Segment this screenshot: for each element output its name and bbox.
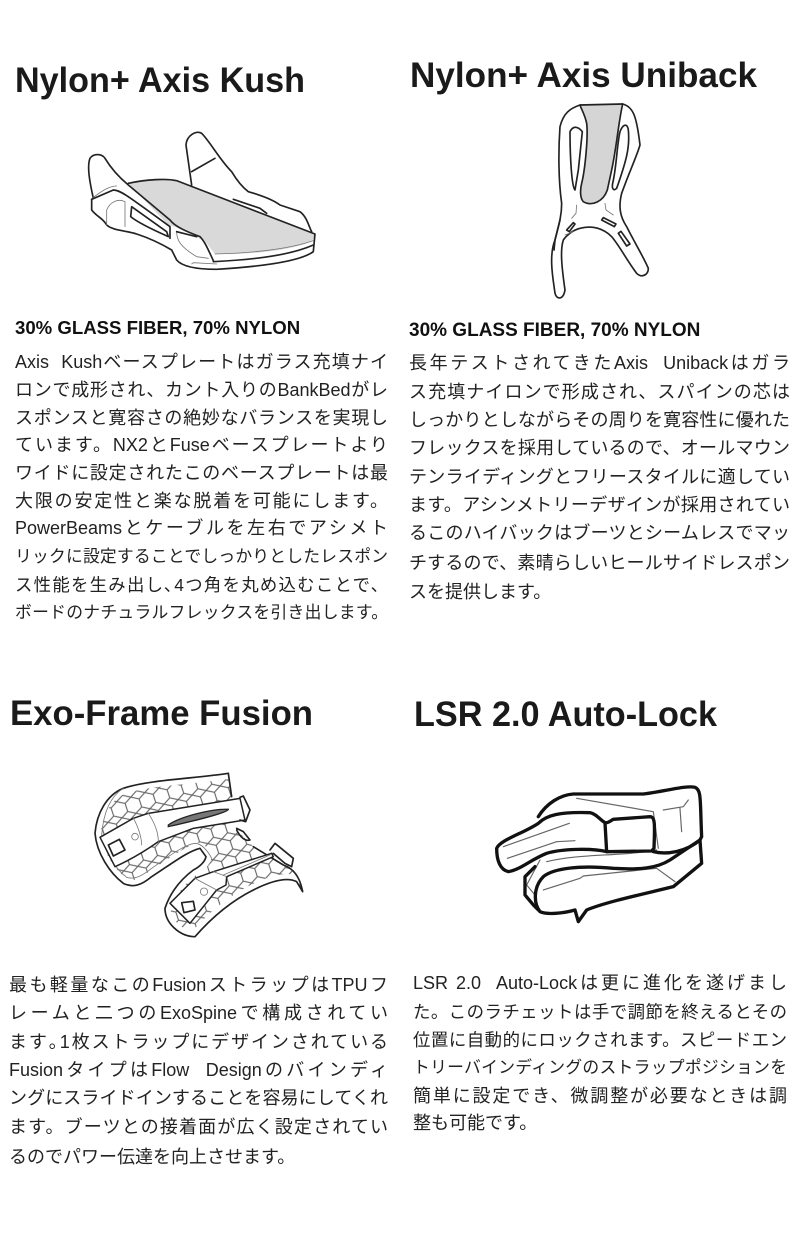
heading: Nylon+ Axis Uniback: Nylon+ Axis Uniback [410, 56, 758, 95]
text block: Axis Kush description: ボードのナチュラルフレックスを引き出します。 [15, 603, 388, 622]
text block: Axis Uniback description: ス充填ナイロンで形成され、スパインの芯は [409, 382, 790, 402]
text block: Axis Uniback description: ます。アシンメトリーデザインが採用されてい [409, 495, 790, 515]
icon: Axis Uniback highback [552, 104, 648, 298]
text block: LSR 2.0 Auto-Lock description: 位置に自動的にロックされます。スピードエン [413, 1030, 787, 1050]
text block: LSR 2.0 Auto-Lock description: 簡単に設定でき、微調整が必要なときは調 [413, 1086, 787, 1106]
text block: Exo-Frame Fusion description: ます。ブーツとの接着面が広く設定されてい [9, 1117, 388, 1137]
text block: Axis Kush description: ています。NX2とFuseベースプレートより [15, 435, 388, 455]
text block: Axis Kush description: ス性能を生み出し､4つ角を丸め込むことで、 [15, 575, 388, 595]
text block: Axis Kush description: スポンスと寛容さの絶妙なバランスを実現し [15, 408, 388, 428]
text block: Exo-Frame Fusion description: ます｡1枚ストラップにデザインされている [9, 1032, 388, 1052]
text block: Axis Kush description: ワイドに設定されたこのベースプレートは最 [15, 463, 388, 483]
text block: LSR 2.0 Auto-Lock description [413, 973, 787, 1133]
text block: Exo-Frame Fusion description: 最も軽量なこのFusionストラップはTPUフ [9, 975, 388, 995]
text block: Axis Kush description [15, 352, 388, 622]
text block: Exo-Frame Fusion description: るのでパワー伝達を向上させます。 [9, 1147, 295, 1167]
text block: Axis Uniback description: フレックスを採用しているので、オールマウン [409, 438, 790, 458]
text block: Axis Kush description: 大限の安定性と楽な脱着を可能にします。 [15, 491, 388, 511]
text block: Axis Uniback description: 長年テストされてきたAxis Unibackはガラ [409, 353, 790, 373]
text block: Axis Kush description: リックに設定することでしっかりとしたレスポン [15, 547, 388, 566]
text block: Axis Kush description: Axis Kushベースプレートはガラス充填ナイ [15, 352, 388, 372]
text block: Axis Uniback description: しっかりとしながらその周りを寛容性に優れた [409, 410, 790, 430]
heading: LSR 2.0 Auto-Lock: LSR 2.0 Auto-Lock [414, 695, 718, 734]
text block: Exo-Frame Fusion description: FusionタイプはFlow Designのバインディ [9, 1060, 388, 1080]
text block: Exo-Frame Fusion description: ングにスライドインすることを容易にしてくれ [9, 1088, 388, 1108]
text block: LSR 2.0 Auto-Lock description: た。このラチェットは手で調節を終えるとその [413, 1002, 787, 1022]
text block: LSR 2.0 Auto-Lock description: LSR 2.0 Auto-Lockは更に進化を遂げまし [413, 973, 787, 993]
text block: LSR 2.0 Auto-Lock description: トリーバインディングのストラップポジションを [413, 1058, 787, 1077]
text block: Axis Uniback description: チするので、素晴らしいヒールサイドレスポン [409, 553, 790, 573]
heading: Nylon+ Axis Kush: Nylon+ Axis Kush [15, 61, 305, 100]
text block: Axis Uniback description: スを提供します。 [409, 582, 551, 602]
heading: Exo-Frame Fusion: Exo-Frame Fusion [10, 694, 313, 733]
text block: Axis Kush description: PowerBeamsとケーブルを左右でアシメト [15, 518, 388, 538]
text block: Exo-Frame Fusion description: レームと二つのExoSpineで構成されてい [9, 1003, 388, 1023]
text block: Axis Uniback description: るこのハイバックはブーツとシームレスでマッ [409, 523, 790, 543]
text block: LSR 2.0 Auto-Lock description: 整も可能です。 [413, 1113, 537, 1133]
text block: Axis Uniback description [409, 353, 790, 602]
label: Kush material: 30% GLASS FIBER, 70% NYLON [15, 317, 300, 338]
text block: Axis Uniback description: テンライディングとフリースタイルに適してい [409, 467, 790, 487]
text block: Axis Kush description: ロンで成形され、カント入りのBankBedがレ [15, 380, 388, 400]
label: Uniback material: 30% GLASS FIBER, 70% NYLON [409, 320, 700, 341]
icon: Exo-Frame Fusion strap [95, 773, 303, 937]
text block: Exo-Frame Fusion description [9, 975, 388, 1167]
icon: Axis Kush baseplate [89, 132, 315, 269]
icon: LSR 2.0 Auto-Lock ratchet [497, 787, 702, 922]
